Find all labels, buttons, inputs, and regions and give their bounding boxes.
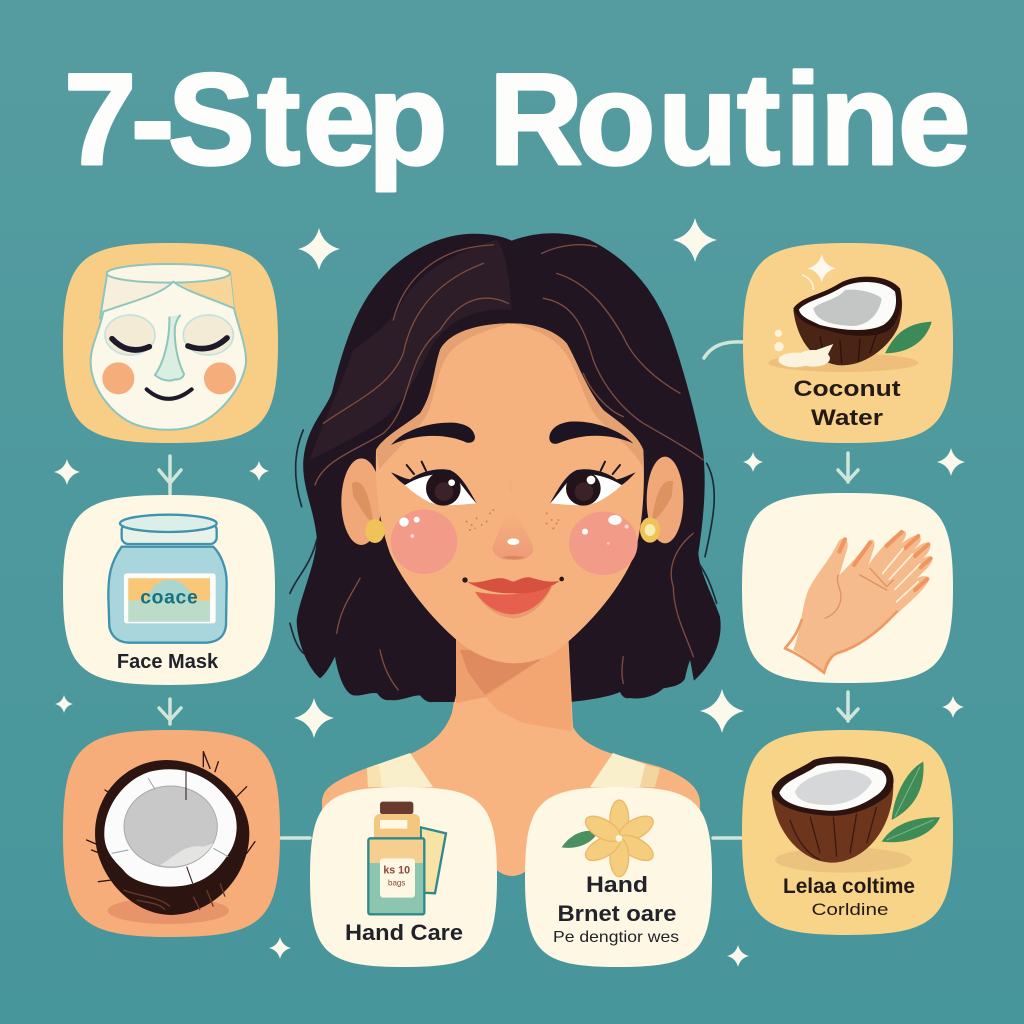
hand shape bbox=[793, 531, 932, 673]
label: Corldine: Corldine bbox=[812, 900, 888, 919]
coconut shell bbox=[95, 760, 249, 915]
card: coconut water bbox=[743, 243, 953, 443]
shoulders and chest bbox=[322, 695, 700, 876]
shadow bbox=[775, 847, 912, 873]
bottle label bbox=[380, 858, 415, 898]
eye right bbox=[550, 462, 636, 506]
mask top band bbox=[100, 273, 234, 318]
freckles bbox=[466, 509, 559, 531]
mask eye patches bbox=[105, 315, 233, 355]
palm lines bbox=[825, 568, 893, 618]
card: face mask jar bbox=[63, 495, 275, 685]
finger gaps bbox=[883, 548, 920, 602]
flesh bbox=[799, 282, 896, 330]
label: Brnet oare: Brnet oare bbox=[558, 901, 676, 926]
sparkles bbox=[54, 218, 965, 967]
card: hand care bottle: ks 10 bbox=[383, 864, 410, 876]
card: face mask jar: coace bbox=[140, 588, 198, 609]
bottle shoulder bbox=[374, 814, 420, 847]
rim bbox=[772, 756, 894, 816]
card: hand care bottle bbox=[310, 787, 497, 967]
bottle back card bbox=[421, 827, 446, 893]
mask nose bbox=[155, 315, 184, 381]
label: Face Mask: Face Mask bbox=[117, 651, 219, 673]
flesh bbox=[779, 763, 886, 811]
jar body bbox=[108, 547, 227, 643]
label: Pe dengtior wes: Pe dengtior wes bbox=[553, 929, 679, 946]
label: Hand Care: Hand Care bbox=[345, 920, 463, 945]
fingertips bbox=[839, 532, 931, 590]
shirt straps bbox=[367, 753, 660, 787]
cheeks bbox=[391, 509, 638, 575]
title: 7-Step Routine bbox=[64, 46, 970, 192]
water bbox=[813, 290, 882, 326]
ear right bbox=[647, 457, 683, 543]
shell bbox=[793, 288, 902, 365]
eye left bbox=[391, 462, 477, 506]
arrows and connectors bbox=[159, 342, 858, 838]
shell bbox=[772, 785, 893, 863]
label: Coconut: Coconut bbox=[794, 376, 901, 401]
brows bbox=[391, 421, 633, 445]
ground shadow bbox=[768, 353, 918, 372]
hair bbox=[297, 233, 721, 702]
hairline shadow bbox=[376, 323, 643, 470]
water bbox=[795, 770, 872, 805]
coconut shadow bbox=[108, 897, 229, 924]
flower bbox=[581, 800, 657, 877]
coconut water bbox=[124, 786, 217, 867]
rim bbox=[793, 277, 901, 336]
coconut flakes bbox=[774, 330, 833, 367]
card: hand bbox=[742, 493, 953, 683]
jar label bbox=[124, 573, 216, 623]
coconut cracks bbox=[112, 778, 228, 857]
label: Water: Water bbox=[811, 405, 884, 430]
card: flower hand breast care bbox=[525, 787, 712, 967]
label: Lelaa coltime: Lelaa coltime bbox=[783, 875, 915, 898]
coconut flesh bbox=[104, 769, 237, 887]
jar lid bbox=[122, 523, 217, 544]
ear left bbox=[341, 458, 381, 545]
hand edges bbox=[785, 612, 897, 673]
bottle body bbox=[368, 838, 424, 914]
card: hand care bottle: bags bbox=[388, 879, 405, 888]
neck bbox=[432, 630, 585, 745]
flyaway hair bbox=[290, 430, 717, 653]
bottle cap bbox=[380, 802, 413, 814]
leaf bbox=[885, 322, 932, 353]
mask cheeks bbox=[102, 362, 236, 394]
face bbox=[376, 323, 644, 663]
leaves bbox=[882, 762, 940, 842]
card: cracked coconut bbox=[63, 730, 280, 937]
mask mouth bbox=[147, 389, 192, 399]
lips bbox=[462, 577, 564, 618]
hair strands bbox=[315, 245, 703, 690]
sparkle bbox=[808, 254, 836, 282]
leaf bbox=[562, 831, 598, 848]
label: Hand: Hand bbox=[586, 872, 648, 897]
hair highlight bbox=[310, 240, 512, 460]
card: face mask illustration bbox=[63, 243, 278, 443]
card: coconut with leaves bbox=[742, 730, 953, 935]
coconut husk texture bbox=[123, 883, 225, 910]
earrings bbox=[365, 517, 660, 543]
mask face bbox=[91, 282, 246, 430]
coconut fibres bbox=[87, 752, 255, 882]
nose bbox=[492, 482, 533, 560]
woman portrait bbox=[290, 233, 721, 876]
mask closed eyes bbox=[112, 338, 227, 350]
